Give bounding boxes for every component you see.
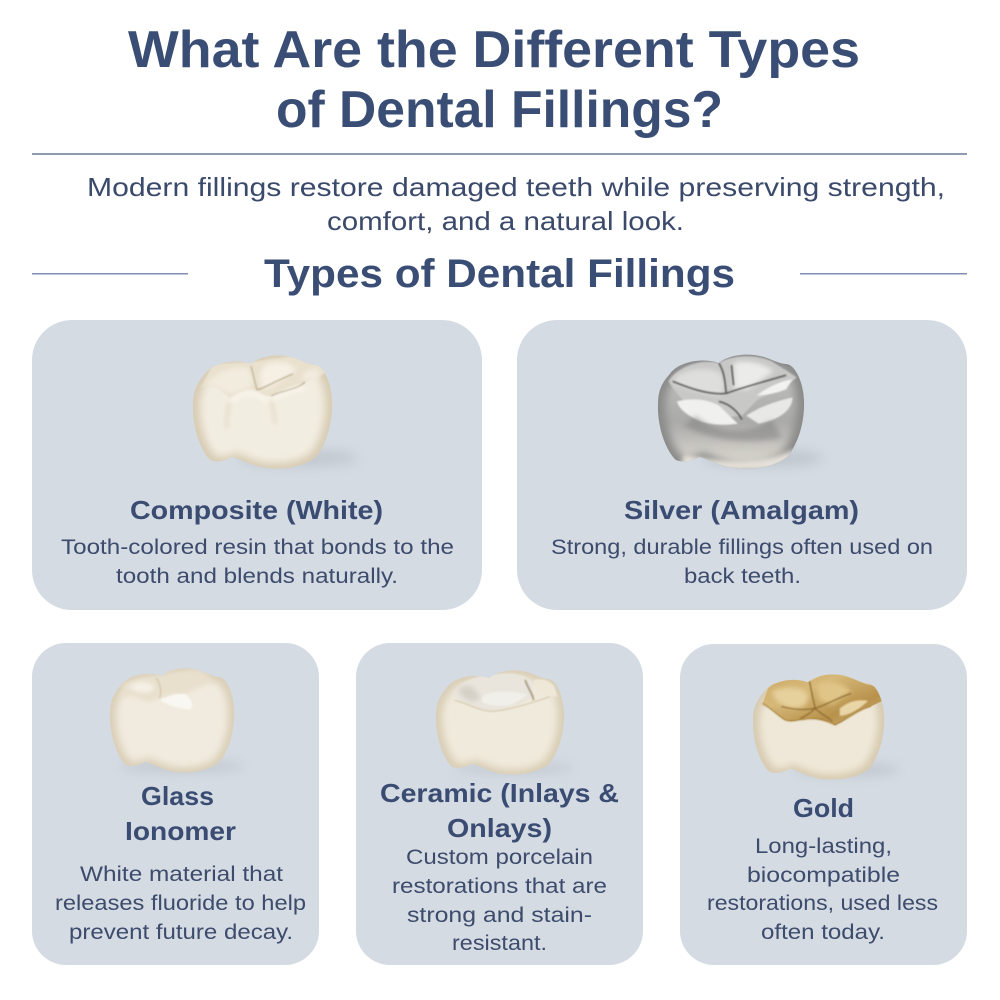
card description: White material that [80, 862, 283, 886]
panel: composite [32, 320, 482, 610]
icon: glass ionomer tooth [110, 668, 234, 774]
panel: gold [680, 644, 967, 965]
card description: tooth and blends naturally. [116, 564, 398, 588]
card description: back teeth. [684, 564, 801, 588]
section heading: Types of Dental Fillings [264, 252, 735, 296]
icon: composite tooth [192, 356, 352, 469]
card description: Tooth-colored resin that bonds to the [61, 535, 454, 559]
title: of Dental Fillings? [276, 81, 723, 139]
title: What Are the Different Types [128, 21, 860, 79]
card title: Ceramic (Inlays & [380, 778, 619, 808]
card description: Custom porcelain [406, 845, 593, 869]
intro text: comfort, and a natural look. [327, 206, 684, 236]
card title: Ionomer [125, 816, 236, 846]
card description: resistant. [452, 931, 547, 955]
card description: restorations that are [392, 874, 607, 898]
card description: Strong, durable fillings often used on [551, 535, 933, 559]
card title: Silver (Amalgam) [624, 495, 859, 525]
panel: silver [517, 320, 967, 610]
card title: Composite (White) [130, 495, 383, 525]
icon: gold tooth [753, 674, 892, 780]
intro text: Modern fillings restore damaged teeth while preserving strength, [87, 172, 945, 202]
card title [380, 778, 619, 843]
card description [55, 862, 306, 944]
panel: ceramic [356, 643, 643, 965]
icon: silver tooth [658, 354, 819, 469]
card description: prevent future decay. [69, 920, 293, 944]
card description [551, 535, 933, 588]
icon: ceramic tooth [436, 670, 564, 774]
card description [707, 834, 938, 944]
card description: releases fluoride to help [55, 891, 306, 915]
intro text [87, 172, 945, 236]
card description: restorations, used less [707, 891, 938, 915]
panel: glass ionomer [32, 643, 319, 965]
card title [125, 781, 236, 846]
card title: Gold [793, 793, 854, 823]
card description: Long-lasting, [755, 834, 892, 858]
card description: strong and stain- [407, 903, 592, 927]
card description: biocompatible [747, 863, 900, 887]
card description [392, 845, 607, 955]
card title: Onlays) [447, 813, 552, 843]
title [128, 21, 860, 139]
card description [61, 535, 454, 588]
card description: often today. [761, 920, 885, 944]
card title: Glass [141, 781, 214, 811]
